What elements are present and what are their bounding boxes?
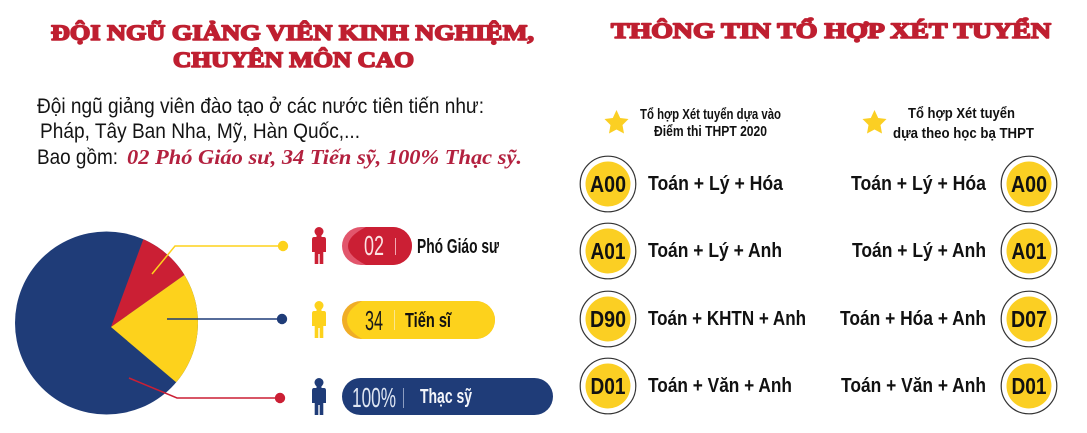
icon: navy person bbox=[312, 378, 326, 415]
stat pill: 100% Thạc sỹ bbox=[342, 378, 553, 415]
row: A01 right: Toán + Lý + Anh bbox=[852, 240, 986, 262]
row: D90 left bbox=[580, 291, 806, 347]
row: D01 left: D01 bbox=[590, 373, 626, 399]
left heading: CHUYÊN MÔN CAO bbox=[173, 47, 414, 72]
row: A01 left: A01 bbox=[590, 238, 626, 264]
stat pill: 34 Tiến sĩ bbox=[342, 301, 495, 339]
left heading bbox=[51, 20, 534, 72]
icon: red person bbox=[312, 227, 326, 264]
row: A01 left bbox=[580, 223, 782, 279]
intro text block: Đội ngũ giảng viên đào tạo ở các nước tiên tiến như: bbox=[37, 95, 484, 118]
connector: Tiến sĩ bbox=[167, 314, 287, 324]
icon: yellow person bbox=[312, 301, 326, 338]
row: D01 right bbox=[841, 358, 1057, 414]
intro text block: 02 Phó Giáo sư, 34 Tiến sỹ, 100% Thạc sỹ. bbox=[127, 145, 522, 169]
stat pill: 34 Tiến sĩ: 34 bbox=[365, 305, 383, 336]
row: D01 right: Toán + Văn + Anh bbox=[841, 375, 986, 397]
intro text block bbox=[37, 95, 522, 169]
column header right: dựa theo học bạ THPT bbox=[893, 125, 1034, 142]
row: D90 left: Toán + KHTN + Anh bbox=[648, 308, 806, 330]
row: D90 left: D90 bbox=[590, 306, 626, 332]
row: A00 left: A00 bbox=[590, 171, 626, 197]
row: D01 left: Toán + Văn + Anh bbox=[648, 375, 792, 397]
stat pill: 100% Thạc sỹ: Thạc sỹ bbox=[420, 386, 473, 408]
row: A01 left: Toán + Lý + Anh bbox=[648, 240, 782, 262]
column header right bbox=[893, 105, 1034, 142]
stat pill: 02 Phó Giáo sư: 02 bbox=[364, 230, 384, 261]
row: A00 left bbox=[580, 156, 784, 212]
connector: Thạc sỹ bbox=[129, 378, 285, 403]
row: A00 right: A00 bbox=[1011, 171, 1047, 197]
stat pill: 02 Phó Giáo sư bbox=[342, 227, 499, 265]
row: A00 right bbox=[851, 156, 1057, 212]
column header left: Điểm thi THPT 2020 bbox=[654, 123, 767, 140]
stat pill: 100% Thạc sỹ: 100% bbox=[352, 382, 396, 413]
icon: star right bbox=[862, 110, 886, 134]
right heading: THÔNG TIN TỔ HỢP XÉT TUYỂN bbox=[611, 18, 1051, 43]
connector: Phó Giáo sư bbox=[152, 241, 288, 274]
row: A00 left: Toán + Lý + Hóa bbox=[648, 173, 784, 195]
row: D07 right: D07 bbox=[1011, 306, 1047, 332]
row: D07 right: Toán + Hóa + Anh bbox=[840, 308, 986, 330]
row: D01 right: D01 bbox=[1012, 373, 1047, 399]
row: D07 right bbox=[840, 291, 1057, 347]
pie chart bbox=[15, 232, 198, 414]
intro text block: Pháp, Tây Ban Nha, Mỹ, Hàn Quốc,... bbox=[40, 120, 360, 143]
column header right: Tổ hợp Xét tuyển bbox=[908, 105, 1015, 122]
row: A00 right: Toán + Lý + Hóa bbox=[851, 173, 987, 195]
left heading: ĐỘI NGŨ GIẢNG VIÊN KINH NGHIỆM, bbox=[51, 20, 534, 45]
stat pill: 02 Phó Giáo sư: Phó Giáo sư bbox=[417, 236, 499, 258]
intro text block: Bao gồm: bbox=[37, 146, 118, 169]
row: D01 left bbox=[580, 358, 792, 414]
column header left bbox=[640, 106, 781, 140]
row: A01 right bbox=[852, 223, 1057, 279]
stat pill: 34 Tiến sĩ: Tiến sĩ bbox=[405, 310, 452, 332]
icon: star left bbox=[604, 110, 628, 134]
row: A01 right: A01 bbox=[1012, 238, 1047, 264]
column header left: Tổ hợp Xét tuyển dựa vào bbox=[640, 106, 781, 123]
